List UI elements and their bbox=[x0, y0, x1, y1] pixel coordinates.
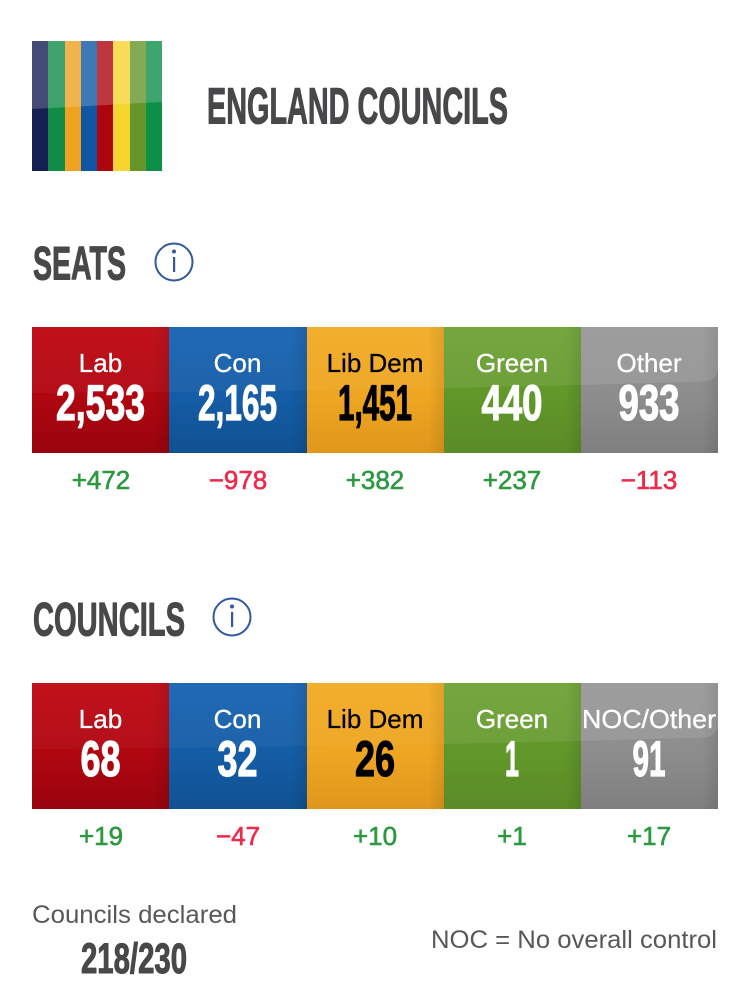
Con councils tile bbox=[169, 683, 307, 851]
Lib Dem councils tile bbox=[307, 683, 444, 851]
Con councils tile: 32 bbox=[218, 731, 258, 787]
heading: seats: SEATS bbox=[33, 236, 126, 290]
Green councils tile: Green bbox=[476, 704, 548, 734]
NOC/Other councils tile bbox=[581, 683, 718, 851]
Lib Dem councils tile: +10 bbox=[353, 821, 397, 851]
Lab councils tile: Lab bbox=[79, 704, 122, 734]
icon: councils info bbox=[214, 598, 250, 636]
councils declared label: Councils declared bbox=[32, 901, 237, 929]
panel: seats results bbox=[32, 327, 718, 495]
Con councils tile: −47 bbox=[216, 821, 260, 851]
Lab councils tile bbox=[32, 683, 169, 851]
Lab councils tile: +19 bbox=[79, 821, 123, 851]
Lib Dem councils tile: Lib Dem bbox=[327, 704, 423, 734]
icon: seats info bbox=[156, 244, 192, 280]
Other seats tile: 933 bbox=[618, 375, 680, 431]
NOC/Other councils tile: NOC/Other bbox=[582, 704, 716, 734]
Green councils tile: +1 bbox=[497, 821, 527, 851]
Lab seats tile: +472 bbox=[72, 465, 130, 495]
Con seats tile: Con bbox=[214, 348, 261, 378]
panel: councils results bbox=[32, 683, 718, 851]
Green seats tile: Green bbox=[476, 348, 548, 378]
Con seats tile: 2,165 bbox=[198, 375, 277, 431]
Lib Dem councils tile: 26 bbox=[355, 731, 395, 787]
Lib Dem seats tile: Lib Dem bbox=[327, 348, 423, 378]
NOC note: NOC = No overall control bbox=[431, 926, 717, 954]
logo: coloured stripes bbox=[32, 41, 162, 171]
title: ENGLAND COUNCILS bbox=[207, 78, 508, 134]
Con seats tile: −978 bbox=[209, 465, 267, 495]
Con councils tile: Con bbox=[214, 704, 261, 734]
heading: councils: COUNCILS bbox=[33, 592, 185, 646]
Lib Dem seats tile: 1,451 bbox=[338, 375, 412, 431]
Green seats tile bbox=[444, 327, 581, 495]
Green seats tile: +237 bbox=[483, 465, 541, 495]
NOC/Other councils tile: 91 bbox=[632, 731, 666, 787]
Lab seats tile: Lab bbox=[79, 348, 122, 378]
councils declared figure: 218/230 bbox=[81, 935, 187, 983]
NOC/Other councils tile: +17 bbox=[627, 821, 671, 851]
Green seats tile: 440 bbox=[482, 375, 542, 431]
Lab seats tile bbox=[32, 327, 169, 495]
Other seats tile: Other bbox=[616, 348, 682, 378]
Lab councils tile: 68 bbox=[80, 731, 120, 787]
Green councils tile: 1 bbox=[505, 731, 519, 787]
Green councils tile bbox=[444, 683, 581, 851]
Con seats tile bbox=[169, 327, 307, 495]
Other seats tile bbox=[581, 327, 718, 495]
Lib Dem seats tile bbox=[307, 327, 444, 495]
Other seats tile: −113 bbox=[621, 465, 677, 495]
Lib Dem seats tile: +382 bbox=[346, 465, 404, 495]
Lab seats tile: 2,533 bbox=[56, 375, 145, 431]
